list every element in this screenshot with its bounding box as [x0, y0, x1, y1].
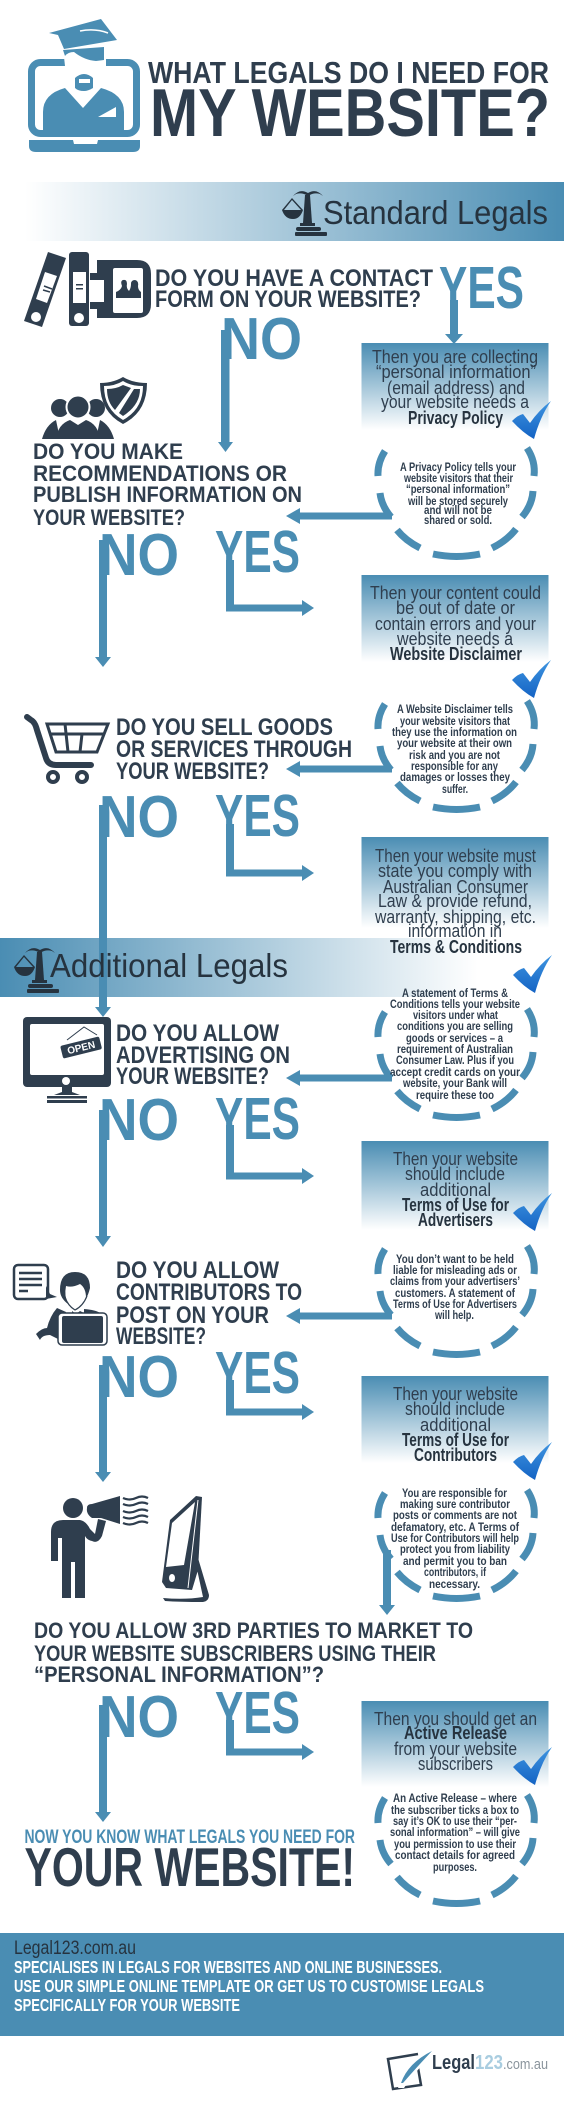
section band: standard legals — [25, 182, 564, 241]
arrow: advertisers to question 5 — [286, 1308, 392, 1324]
icon: people and shield — [42, 377, 147, 439]
panel: terms and conditions: information in — [408, 921, 502, 941]
panel: terms of use for advertisers: should include — [405, 1164, 505, 1184]
no 4 with arrow: NO — [99, 1087, 179, 1153]
question 2: DO YOU MAKE — [33, 439, 183, 464]
panel: privacy policy: “personal information” — [376, 362, 536, 382]
circle: terms explanation: accept credit cards on your — [390, 1067, 520, 1079]
section band: standard legals: Standard Legals — [323, 194, 548, 231]
no 5 with arrow: NO — [99, 1344, 179, 1410]
heading: additional legals — [14, 947, 288, 993]
circle: disclaimer explanation: responsible for any — [411, 761, 498, 773]
circle: privacy policy explanation: and will not be — [424, 505, 492, 517]
yes 3 with elbow arrow: YES — [215, 783, 300, 849]
circle: active release explanation: sonal information” – will give — [390, 1827, 520, 1839]
question 2: PUBLISH INFORMATION ON — [33, 482, 302, 507]
question 4: ADVERTISING ON — [116, 1042, 290, 1069]
header icon: graduate in laptop — [29, 19, 140, 152]
panel: terms and conditions: state you comply with — [378, 861, 532, 881]
circle: active release explanation: purposes. — [433, 1862, 477, 1874]
panel: active release: Then you should get an — [374, 1709, 537, 1729]
panel: terms of use for contributors: should include — [405, 1399, 505, 1419]
question 1: FORM ON YOUR WEBSITE? — [155, 286, 421, 313]
arrow: privacy to question 2 — [286, 508, 392, 524]
circle: contributors explanation — [378, 1488, 534, 1598]
panel: terms of use for contributors: additional — [420, 1415, 491, 1435]
circle: terms explanation: A statement of Terms & — [402, 988, 508, 1000]
panel: active release: Active Release — [404, 1723, 507, 1743]
closing heading: YOUR WEBSITE! — [24, 1836, 355, 1898]
yes 3 with elbow arrow — [215, 783, 314, 881]
no 2 with arrow: NO — [99, 522, 179, 588]
footer logo: .com.au — [503, 2056, 548, 2073]
circle: advertisers explanation: claims from your advertisers’ — [390, 1276, 520, 1288]
panel: terms and conditions: Law & provide refund, — [378, 891, 532, 911]
panel: website disclaimer: Website Disclaimer — [390, 644, 522, 664]
circle: contributors explanation: Use for Contributors will help — [391, 1533, 519, 1545]
circle: contributors explanation: contributors, if — [424, 1567, 486, 1579]
circle: active release explanation: An Active Release – where — [393, 1793, 517, 1805]
panel: website disclaimer — [362, 575, 548, 664]
no 6 with arrow — [95, 1684, 179, 1822]
icon: desktop computer — [162, 1496, 209, 1602]
panel: active release: subscribers — [418, 1754, 493, 1774]
question 6: YOUR WEBSITE SUBSCRIBERS USING THEIR — [34, 1641, 436, 1666]
panel: terms and conditions: warranty, shipping, etc. — [374, 907, 536, 927]
question 3: YOUR WEBSITE? — [116, 758, 269, 785]
heading: additional legals: Additional Legals — [50, 947, 288, 984]
icon: shopping cart — [27, 717, 108, 782]
circle: disclaimer explanation: they use the information on — [392, 727, 517, 739]
icon: check 1 — [512, 401, 551, 439]
question 4: YOUR WEBSITE? — [116, 1063, 269, 1090]
panel: website disclaimer: contain errors and your — [375, 614, 536, 634]
circle: contributors explanation: and permit you to ban — [403, 1556, 507, 1568]
yes 1 with arrow — [439, 255, 524, 344]
circle: contributors explanation: necessary. — [429, 1579, 480, 1591]
icon: check 5 — [513, 1442, 552, 1480]
question 4: DO YOU ALLOW — [116, 1020, 279, 1047]
question 5: WEBSITE? — [116, 1323, 206, 1350]
circle: active release explanation — [378, 1793, 534, 1903]
arrow: disclaimer to question 3 — [286, 761, 392, 777]
no 4 with arrow — [95, 1087, 179, 1247]
question 1 — [155, 265, 433, 313]
question 5 — [116, 1257, 302, 1350]
panel: terms and conditions — [362, 837, 548, 957]
no 1 with arrow: NO — [221, 306, 302, 372]
panel: privacy policy: your website needs a — [381, 392, 530, 412]
circle: disclaimer explanation: your website at their own — [397, 738, 512, 750]
no 3 with arrow: NO — [99, 784, 179, 850]
closing heading — [24, 1827, 355, 1898]
question 3: OR SERVICES THROUGH — [116, 736, 352, 763]
icon: monitor with open sign: OPEN — [66, 1040, 96, 1057]
footer logo: Legal — [432, 2052, 475, 2074]
circle: advertisers explanation: Terms of Use for Advertisers — [393, 1299, 517, 1311]
circle: privacy policy explanation: will be stored securely — [407, 496, 508, 508]
panel: privacy policy: (email address) and — [387, 378, 525, 398]
icon: contributor with speech bubble — [14, 1265, 107, 1345]
panel: terms and conditions: Then your website must — [375, 846, 536, 866]
no 1 with arrow — [218, 306, 302, 452]
no 5 with arrow — [95, 1344, 179, 1482]
panel: website disclaimer: website needs a — [396, 629, 514, 649]
panel: privacy policy — [362, 343, 548, 430]
circle: terms explanation: require these too — [416, 1090, 494, 1102]
circle: disclaimer explanation: risk and you are not — [409, 750, 500, 762]
panel: active release: from your website — [394, 1739, 517, 1759]
question 6: DO YOU ALLOW 3RD PARTIES TO MARKET TO — [34, 1618, 473, 1643]
circle: contributors explanation: protect you from liability — [400, 1544, 510, 1556]
circle: terms explanation: Consumer Law. Plus if you — [396, 1055, 514, 1067]
panel: active release — [362, 1701, 548, 1787]
circle: privacy policy explanation: website visitors that their — [403, 473, 513, 485]
circle: disclaimer explanation: A Website Disclaimer tells — [397, 704, 513, 716]
question 4 — [116, 1020, 290, 1090]
circle: terms explanation: website, your Bank will — [402, 1078, 507, 1090]
circle: privacy policy explanation: “personal information” — [406, 484, 510, 496]
icon: monitor with open sign — [23, 1017, 111, 1103]
circle: advertisers explanation: customers. A statement of — [395, 1288, 515, 1300]
panel: privacy policy: Then you are collecting — [372, 347, 538, 367]
circle: privacy policy explanation: A Privacy Policy tells your — [400, 462, 516, 474]
panel: terms of use for advertisers: Then your website — [393, 1149, 518, 1169]
yes 5 with elbow arrow: YES — [215, 1340, 300, 1406]
circle: active release explanation: say it’s OK to use their “per- — [393, 1816, 517, 1828]
circle: privacy policy explanation: shared or sold. — [424, 515, 492, 527]
panel: terms of use for advertisers — [362, 1141, 548, 1230]
circle: advertisers explanation: will help. — [434, 1310, 474, 1322]
question 3 — [116, 714, 352, 785]
circle: active release explanation: you permission to use their — [394, 1839, 516, 1851]
circle: contributors explanation: posts or comments are not — [393, 1510, 517, 1522]
panel: terms of use for contributors: Then your website — [393, 1384, 518, 1404]
question 6: “PERSONAL INFORMATION”? — [34, 1662, 324, 1687]
section band: additional legals — [0, 938, 478, 997]
question 5: POST ON YOUR — [116, 1302, 269, 1329]
panel: terms of use for advertisers: Terms of Use for — [402, 1195, 509, 1215]
circle: privacy policy explanation — [378, 448, 534, 556]
circle: terms explanation: Conditions tells your website — [390, 999, 520, 1011]
yes 2 with elbow arrow — [215, 519, 314, 616]
icon: check 3 — [513, 955, 552, 993]
circle: active release explanation: the subscriber ticks a box to — [391, 1805, 519, 1817]
yes 4 with elbow arrow: YES — [215, 1086, 300, 1152]
question 5: DO YOU ALLOW — [116, 1257, 279, 1284]
circle: disclaimer explanation: your website visitors that — [400, 716, 510, 728]
panel: terms and conditions: Australian Consumer — [383, 877, 528, 897]
footer band: Legal123.com.au — [14, 1938, 136, 1959]
panel: terms of use for contributors: Terms of Use for — [402, 1430, 509, 1450]
panel: terms and conditions: Terms & Conditions — [390, 937, 522, 957]
panel: privacy policy: Privacy Policy — [408, 408, 503, 428]
yes 4 with elbow arrow — [215, 1086, 314, 1184]
circle: advertisers explanation: You don’t want to be held — [396, 1254, 514, 1266]
yes 6 with elbow arrow: YES — [215, 1680, 300, 1746]
arrow: terms to question 4 — [286, 1070, 392, 1086]
question 2: RECOMMENDATIONS OR — [33, 461, 287, 486]
circle: terms explanation — [378, 988, 534, 1117]
yes 2 with elbow arrow: YES — [215, 519, 300, 585]
circle: terms explanation: requirement of Australian — [397, 1044, 513, 1056]
circle: contributors explanation: making sure contributor — [400, 1499, 510, 1511]
panel: terms of use for advertisers: Advertisers — [418, 1210, 493, 1230]
circle: terms explanation: visitors under what — [413, 1010, 498, 1022]
no 6 with arrow: NO — [99, 1684, 179, 1750]
circle: advertisers explanation — [378, 1246, 534, 1354]
question 2: YOUR WEBSITE? — [33, 505, 185, 530]
panel: terms of use for contributors: Contributors — [414, 1445, 497, 1465]
circle: disclaimer explanation: damages or losses they — [400, 772, 510, 784]
panel: website disclaimer: be out of date or — [396, 598, 515, 618]
footer band — [0, 1933, 564, 2036]
footer logo — [388, 2048, 548, 2089]
panel: website disclaimer: Then your content could — [370, 583, 541, 603]
icon: check 6 — [513, 1747, 552, 1785]
panel: terms of use for contributors — [362, 1376, 548, 1465]
no 2 with arrow — [95, 522, 179, 667]
question 1: DO YOU HAVE A CONTACT — [155, 265, 433, 292]
no 3 with arrow — [95, 784, 179, 1017]
circle: disclaimer explanation — [378, 701, 534, 809]
question 5: CONTRIBUTORS TO — [116, 1279, 302, 1306]
closing heading: NOW YOU KNOW WHAT LEGALS YOU NEED FOR — [24, 1827, 355, 1848]
question 2 — [33, 439, 302, 530]
circle: terms explanation: conditions you are selling — [397, 1021, 513, 1033]
yes 1 with arrow: YES — [439, 255, 524, 321]
circle: active release explanation: contact details for agreed — [395, 1850, 515, 1862]
icon: binders — [24, 252, 151, 327]
circle: terms explanation: goods or services – a — [406, 1033, 503, 1045]
circle: contributors explanation: You are responsible for — [402, 1488, 507, 1500]
panel: terms of use for advertisers: additional — [420, 1180, 491, 1200]
icon: check 4 — [513, 1193, 552, 1231]
circle: disclaimer explanation: suffer. — [442, 784, 468, 796]
footer band: SPECIFICALLY FOR YOUR WEBSITE — [14, 1995, 240, 2015]
arrow: contributors to question 6 — [379, 1550, 395, 1615]
question 3: DO YOU SELL GOODS — [116, 714, 333, 741]
circle: advertisers explanation: liable for misleading ads or — [393, 1265, 517, 1277]
circle: contributors explanation: defamatory, etc. A Terms of — [391, 1522, 519, 1534]
icon: check 2 — [512, 660, 551, 698]
footer logo: 123 — [475, 2052, 503, 2074]
question 6 — [34, 1618, 473, 1687]
icon: person with megaphone — [51, 1496, 148, 1598]
